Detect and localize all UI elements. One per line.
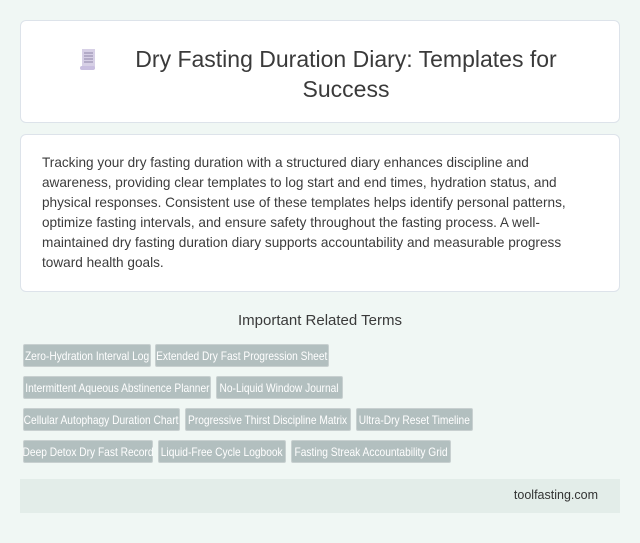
tags: No-Liquid Window Journal [220, 381, 339, 395]
title: Success [303, 76, 389, 102]
description text: awareness, providing clear templates to log start and end times, hydration status, and [42, 175, 557, 190]
icon: document [80, 49, 95, 70]
description card [20, 134, 620, 292]
tags: Progressive Thirst Discipline Matrix [188, 413, 348, 427]
description text: Tracking your dry fasting duration with a structured diary enhances discipline and [42, 155, 529, 170]
tags: Liquid-Free Cycle Logbook [161, 445, 283, 459]
title: Dry Fasting Duration Diary: Templates for [135, 46, 557, 72]
description text: physical responses. Consistent use of these templates helps identify personal patterns, [42, 195, 566, 210]
tags: Deep Detox Dry Fast Record [23, 445, 153, 459]
footer [20, 479, 620, 513]
tags: Fasting Streak Accountability Grid [294, 445, 448, 459]
tags: Extended Dry Fast Progression Sheet [156, 349, 328, 363]
tags: Cellular Autophagy Duration Chart [24, 413, 179, 427]
tags: Zero-Hydration Interval Log [25, 349, 149, 363]
description text [42, 155, 566, 270]
header card [20, 20, 620, 123]
tags: Ultra-Dry Reset Timeline [359, 413, 470, 427]
tags: Intermittent Aqueous Abstinence Planner [25, 381, 209, 395]
description text: maintained dry fasting duration diary supports accountability and measurable progress [42, 235, 561, 250]
description text: optimize fasting intervals, and ensure safety throughout the fasting process. A well- [42, 215, 540, 230]
terms heading: Important Related Terms [238, 312, 402, 329]
title [135, 46, 557, 102]
footer text: toolfasting.com [514, 488, 598, 502]
description text: toward health goals. [42, 255, 164, 270]
